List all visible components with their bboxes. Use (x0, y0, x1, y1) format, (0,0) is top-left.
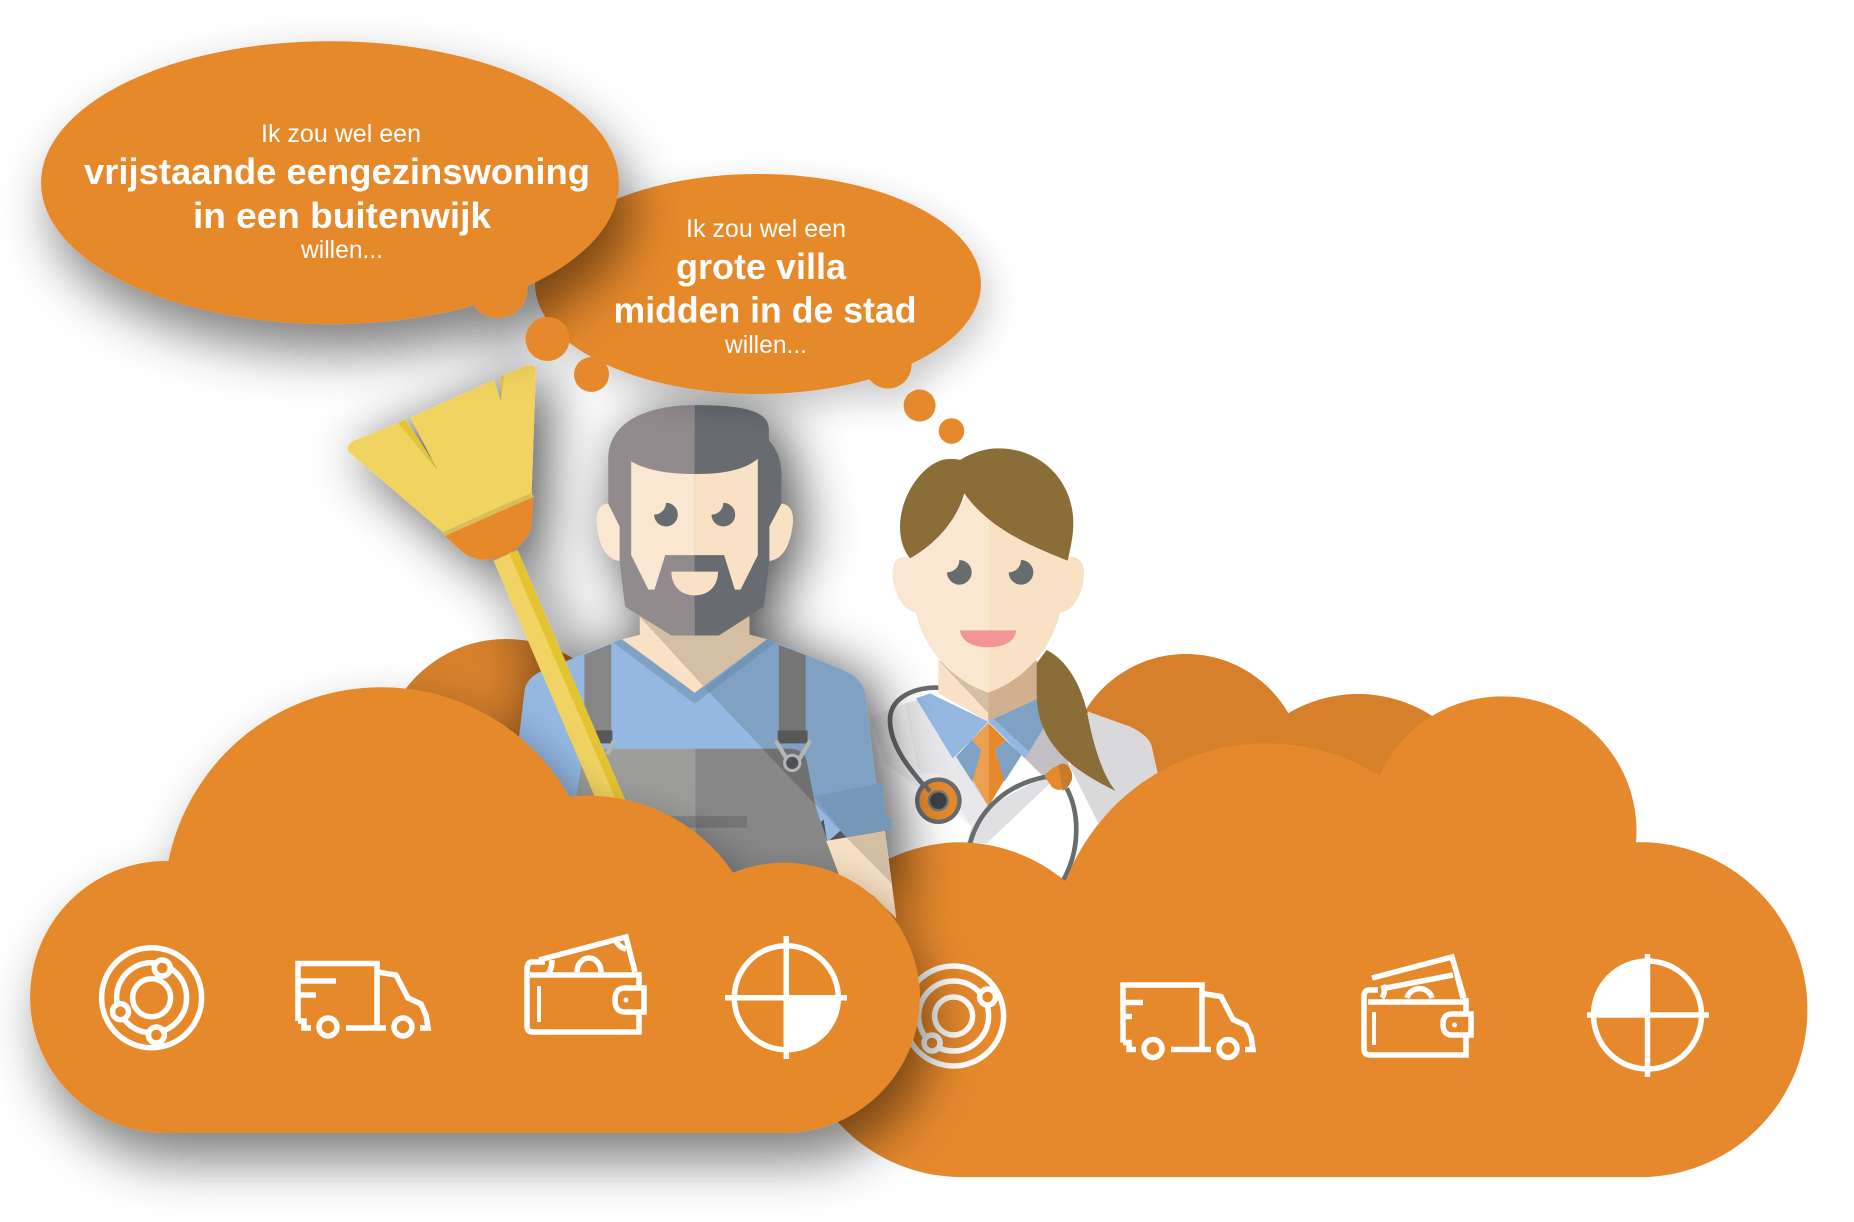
speech bubble: eengezinswoning (41, 41, 619, 324)
man apron (567, 749, 839, 896)
speech bubble: villa (535, 174, 981, 394)
text: villa bubble (614, 215, 916, 359)
text: eengezinswoning bubble: vrijstaande eengezinswoning (84, 151, 590, 192)
doctor mouth (960, 630, 1016, 647)
icon: wallet with money (527, 937, 644, 1032)
cloud: front right (794, 696, 1807, 1177)
icon: wallet with money (1364, 957, 1471, 1055)
man suspender clips (584, 730, 810, 771)
cloud: back right (1068, 654, 1494, 966)
doctor ponytail (1037, 650, 1116, 791)
doctor coat (870, 697, 1158, 880)
text: villa bubble: grote villa (676, 246, 847, 287)
character: man with broom (348, 365, 896, 919)
icons: left cloud (102, 936, 847, 1059)
icon: delivery truck (1123, 985, 1253, 1058)
character: doctor (870, 448, 1158, 880)
icons: right cloud (904, 954, 1709, 1077)
cloud: front left (30, 687, 920, 1133)
cloud: back left (380, 639, 632, 891)
man mouth (671, 572, 718, 595)
text: villa bubble: midden in de stad (614, 290, 916, 330)
text: villa bubble: Ik zou wel een (686, 215, 846, 243)
doctor hair (900, 448, 1073, 561)
text: eengezinswoning bubble: willen... (300, 236, 383, 264)
man sleeve and arm (814, 783, 896, 919)
doctor neck (938, 660, 1042, 723)
doctor shirt and tie (916, 693, 1043, 807)
man hair and beard (608, 405, 782, 636)
text: eengezinswoning bubble (84, 120, 590, 264)
text: eengezinswoning bubble: Ik zou wel een (261, 120, 421, 148)
text: eengezinswoning bubble: in een buitenwijk (193, 195, 492, 236)
thought dots: eengezinswoning (526, 317, 609, 392)
man suspenders (584, 644, 806, 731)
icon: target quarter filled (1587, 954, 1709, 1077)
icon: network rings (904, 966, 1004, 1066)
man shirt (514, 639, 878, 896)
broom handle (494, 550, 627, 804)
thought dots: villa (904, 390, 964, 444)
doctor ears (892, 557, 1084, 613)
icon: delivery truck (298, 964, 428, 1036)
stethoscope clip (1044, 763, 1072, 791)
broom head (348, 365, 536, 560)
man ears (597, 503, 793, 561)
man neck (623, 609, 767, 693)
doctor face (910, 473, 1068, 693)
doctor eyes (947, 560, 1033, 585)
icon: network rings (102, 948, 202, 1048)
icon: target quarter filled (725, 936, 847, 1059)
stethoscope (890, 688, 1076, 880)
man face (631, 459, 758, 590)
text: villa bubble: willen... (724, 331, 807, 359)
man eyes (654, 503, 735, 526)
